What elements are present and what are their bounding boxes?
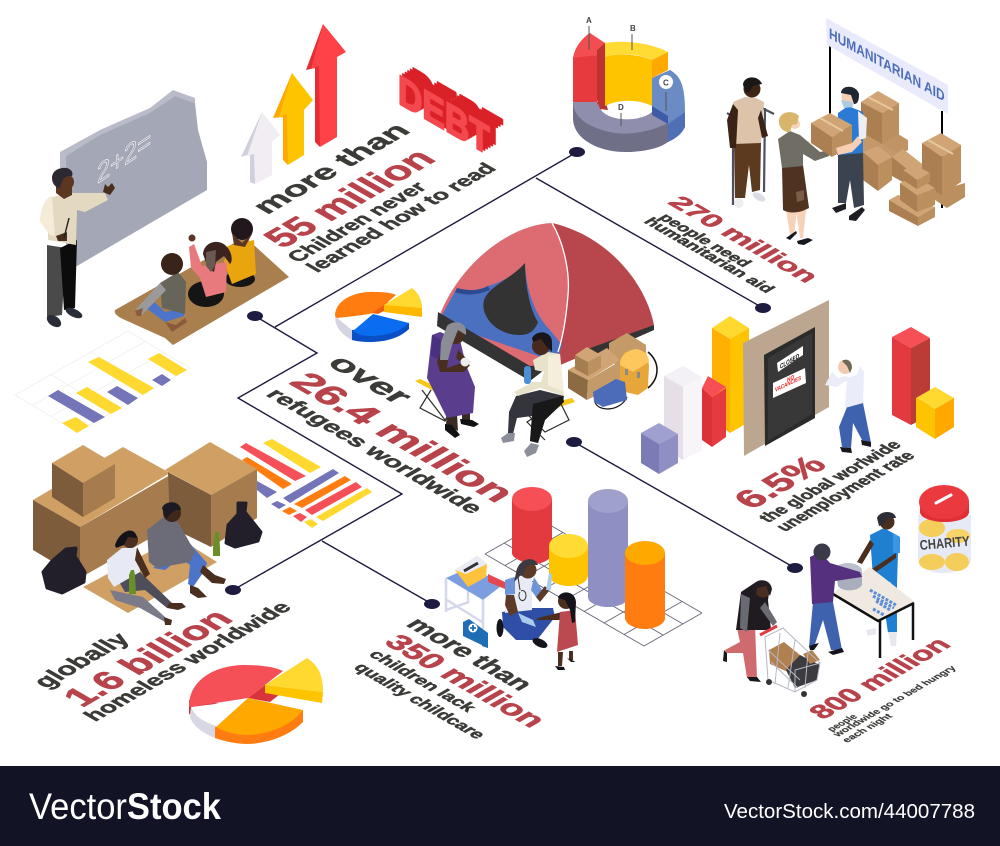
homeless woman xyxy=(107,531,186,625)
text block: 270 million: 270 million xyxy=(662,192,825,287)
text block: 270 million: humanitarian aid xyxy=(640,215,778,296)
chart: coloured floor stripes xyxy=(240,439,372,528)
seated woman with grey hair xyxy=(415,322,479,438)
text block: 55 million: 55 million xyxy=(254,143,444,253)
nurse kneeling xyxy=(496,559,555,650)
text block: 800 million: 800 million xyxy=(802,633,957,723)
refugee belongings: boxes and bags xyxy=(568,333,657,409)
icon: blackboard xyxy=(60,90,207,270)
purple cube xyxy=(641,423,678,474)
pot xyxy=(834,563,862,590)
orange cylinder xyxy=(625,541,665,629)
text block: 6.5% unemployment: the global worlwide xyxy=(754,437,906,525)
cardboard boxes xyxy=(817,91,965,226)
chart: isometric bars with closed door xyxy=(641,300,954,474)
red bar xyxy=(702,376,726,447)
text block: 350 million xyxy=(350,614,553,742)
text block: 800 million: each night xyxy=(840,712,896,745)
icon: crutch man xyxy=(727,77,774,208)
distressed man xyxy=(825,360,871,453)
chart: ring chart with labels: B xyxy=(630,24,636,33)
footer image id: VectorStock.com/44007788 xyxy=(724,801,975,823)
chart: ring chart with labels: D xyxy=(618,103,624,112)
text block: 26.4 million refugees xyxy=(261,351,525,517)
text block: 55 million: more than xyxy=(245,119,418,219)
homeless man xyxy=(147,502,226,598)
closed door wall xyxy=(743,300,829,456)
footer bar xyxy=(0,766,1000,846)
teacher figure xyxy=(40,168,115,330)
text block: 26.4 million refugees: 26.4 million xyxy=(281,366,525,508)
table with bottles xyxy=(815,567,915,658)
footer logo: VectorStock xyxy=(29,786,221,827)
child in grey shirt xyxy=(135,253,187,332)
medical cart xyxy=(446,556,505,630)
yellow bar xyxy=(712,316,749,433)
charity table scene xyxy=(723,512,915,697)
text block: 270 million: people need xyxy=(655,211,755,270)
child in pink shirt xyxy=(188,234,232,307)
text block: 1.6 billion homeless: 1.6 billion xyxy=(53,603,241,712)
chart: floor bar chart with grid xyxy=(15,331,190,433)
child with red dress xyxy=(536,592,578,670)
child in yellow shirt xyxy=(224,218,256,287)
floor mat with children xyxy=(115,218,289,345)
text block: 270 million xyxy=(640,192,825,296)
seated man with water bottle xyxy=(501,332,575,457)
text block: 26.4 million refugees: refugees worldwide xyxy=(261,385,489,517)
connector lines xyxy=(225,147,803,609)
text block: 350 million: 350 million xyxy=(377,630,553,732)
box held between people xyxy=(811,113,862,157)
volunteer xyxy=(832,87,867,221)
icon: rising arrows xyxy=(241,24,346,184)
closed door wall: VACANCIES xyxy=(775,376,801,394)
chart: small floating pie with blue slice xyxy=(335,288,422,342)
chart: ring chart with labels: C xyxy=(663,78,669,88)
red cylinder xyxy=(512,487,552,564)
closed door wall: CLOSED xyxy=(780,353,799,371)
icon: charity jar: CHARITY xyxy=(919,533,971,553)
red and yellow bars right xyxy=(892,327,954,439)
text block: 350 million: children lack xyxy=(365,647,481,715)
text block: 350 million: quality childcare xyxy=(350,660,490,742)
text block: 6.5% unemployment: 6.5% xyxy=(725,450,835,514)
text block: 350 million: more than xyxy=(400,614,539,695)
text block: 800 million: worldwide go to bed hungry xyxy=(830,664,960,739)
nurse serving food xyxy=(857,512,900,646)
shopping cart xyxy=(760,626,820,697)
text block: 6.5% unemployment: unemployment rate xyxy=(771,448,919,534)
homeless scene: cardboard boxes xyxy=(33,442,257,613)
icon: first aid case xyxy=(463,619,488,648)
chart: ring chart with labels xyxy=(573,16,685,152)
purple cylinder xyxy=(588,489,628,607)
icon: humanitarian aid volunteer and boxes xyxy=(811,18,965,226)
text block: 55 million xyxy=(245,119,501,276)
text block: 55 million: Children never xyxy=(282,179,432,266)
chart: ring chart with labels: A xyxy=(586,16,592,25)
text block: 55 million: learned how to read xyxy=(301,160,501,276)
chart: large pie chart xyxy=(189,658,323,744)
icon: charity jar xyxy=(918,485,971,573)
icon: garbage bags xyxy=(43,503,261,593)
text block: 800 million: people xyxy=(825,713,861,734)
text block: 26.4 million refugees: over xyxy=(320,351,420,409)
debt block letters: DEBT xyxy=(398,65,490,165)
icon: woman receiving aid xyxy=(778,112,829,245)
icon: tent xyxy=(437,223,654,381)
white bar xyxy=(664,366,702,460)
text block: 1.6 billion homeless: globally xyxy=(27,629,136,692)
banner: HUMANITARIAN AID xyxy=(829,25,945,106)
closed door wall: NO xyxy=(787,374,794,384)
text block: 1.6 billion homeless: homeless worldwide xyxy=(78,598,297,725)
yellow cylinder xyxy=(549,534,588,586)
chart: cylinders on grid xyxy=(485,487,702,646)
icon: blackboard: 2+2= xyxy=(97,124,151,190)
woman with shopping cart xyxy=(723,580,777,682)
man in purple hoodie xyxy=(809,544,862,655)
